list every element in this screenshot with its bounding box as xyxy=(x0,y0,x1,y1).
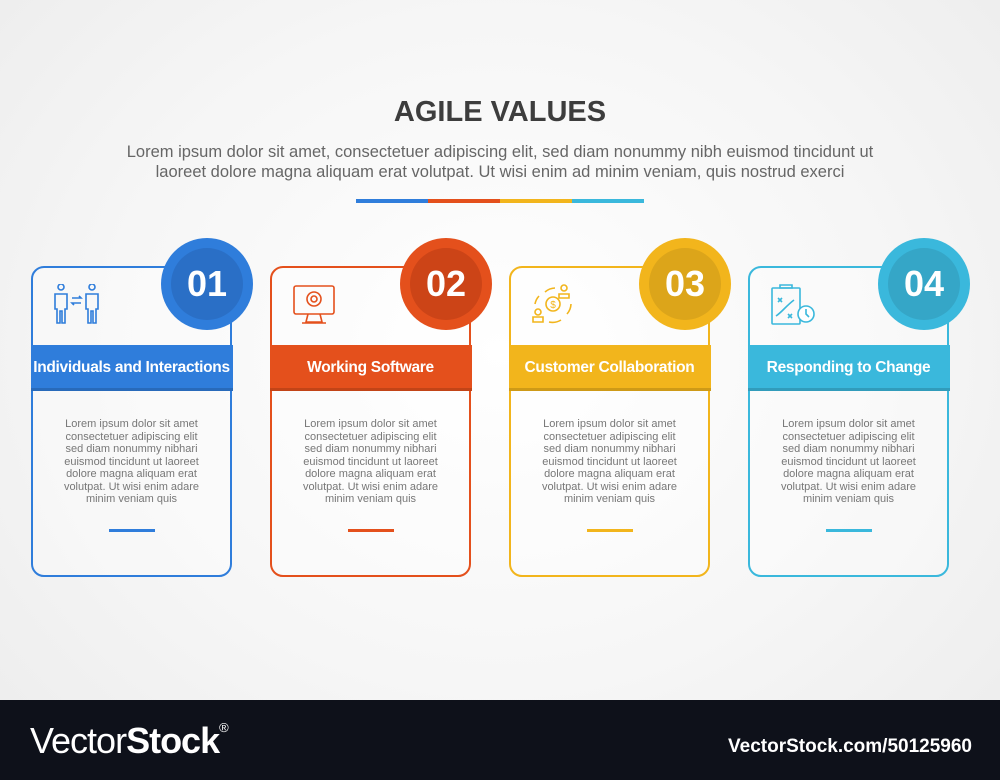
heading: Individuals and Interactions xyxy=(33,359,230,376)
icon: people xyxy=(54,284,99,324)
number badge 03 xyxy=(639,238,731,330)
number badge 04 xyxy=(878,238,970,330)
text: volutpat. Ut wisi enim adare xyxy=(303,480,438,492)
text xyxy=(64,418,199,505)
text: euismod tincidunt ut laoreet xyxy=(781,456,916,468)
text: euismod tincidunt ut laoreet xyxy=(64,456,199,468)
text: euismod tincidunt ut laoreet xyxy=(303,456,438,468)
text: minim veniam quis xyxy=(86,493,177,505)
text: consectetuer adipiscing elit xyxy=(304,430,437,442)
footer bar: VectorStock® xyxy=(30,720,228,761)
text: sed diam nonummy nibhari xyxy=(304,443,437,455)
text xyxy=(303,418,438,505)
text: Lorem ipsum dolor sit amet xyxy=(304,418,437,430)
icon: clipboard strategy xyxy=(771,284,815,325)
text: dolore magna aliquam erat xyxy=(783,468,914,480)
heading xyxy=(508,345,710,391)
text: minim veniam quis xyxy=(803,493,894,505)
number badge 01 xyxy=(161,238,253,330)
text: Lorem ipsum dolor sit amet xyxy=(65,418,198,430)
number badge 01: 01 xyxy=(187,263,227,304)
text xyxy=(542,418,677,505)
number badge 04: 04 xyxy=(904,263,944,304)
text: sed diam nonummy nibhari xyxy=(543,443,676,455)
text: consectetuer adipiscing elit xyxy=(782,430,915,442)
number badge 02 xyxy=(400,238,492,330)
panel: card 1 xyxy=(31,266,232,577)
text: volutpat. Ut wisi enim adare xyxy=(542,480,677,492)
text: euismod tincidunt ut laoreet xyxy=(542,456,677,468)
footer bar xyxy=(0,700,1000,780)
text: volutpat. Ut wisi enim adare xyxy=(781,480,916,492)
number badge 03: 03 xyxy=(665,263,705,304)
text: consectetuer adipiscing elit xyxy=(543,430,676,442)
text: Lorem ipsum dolor sit amet xyxy=(543,418,676,430)
color divider xyxy=(356,199,644,203)
icon: monitor gear xyxy=(293,285,335,324)
subtitle: Lorem ipsum dolor sit amet, consectetuer adipiscing elit, sed diam nonummy nibh euismod tincidunt ut xyxy=(127,143,873,161)
panel: card 3 xyxy=(509,266,710,577)
text: dolore magna aliquam erat xyxy=(305,468,436,480)
heading xyxy=(30,345,232,391)
heading xyxy=(748,345,950,391)
text: minim veniam quis xyxy=(325,493,416,505)
text: sed diam nonummy nibhari xyxy=(782,443,915,455)
panel: card 4 xyxy=(748,266,949,577)
text xyxy=(781,418,916,505)
heading: Working Software xyxy=(307,359,434,376)
text: sed diam nonummy nibhari xyxy=(65,443,198,455)
title: AGILE VALUES xyxy=(394,96,606,128)
text: Lorem ipsum dolor sit amet xyxy=(782,418,915,430)
text: dolore magna aliquam erat xyxy=(66,468,197,480)
panel: card 2 xyxy=(270,266,471,577)
icon: customer money: $ xyxy=(550,300,556,311)
text: dolore magna aliquam erat xyxy=(544,468,675,480)
footer bar: VectorStock.com/50125960 xyxy=(728,736,972,757)
heading xyxy=(270,345,472,391)
subtitle xyxy=(127,143,874,181)
heading: Responding to Change xyxy=(767,359,930,376)
text: volutpat. Ut wisi enim adare xyxy=(64,480,199,492)
text: consectetuer adipiscing elit xyxy=(65,430,198,442)
text: minim veniam quis xyxy=(564,493,655,505)
number badge 02: 02 xyxy=(426,263,466,304)
icon: customer money xyxy=(532,284,572,324)
subtitle: laoreet dolore magna aliquam erat volutpat. Ut wisi enim ad minim veniam, quis nostrud exerci xyxy=(156,163,844,181)
heading: Customer Collaboration xyxy=(525,359,694,376)
